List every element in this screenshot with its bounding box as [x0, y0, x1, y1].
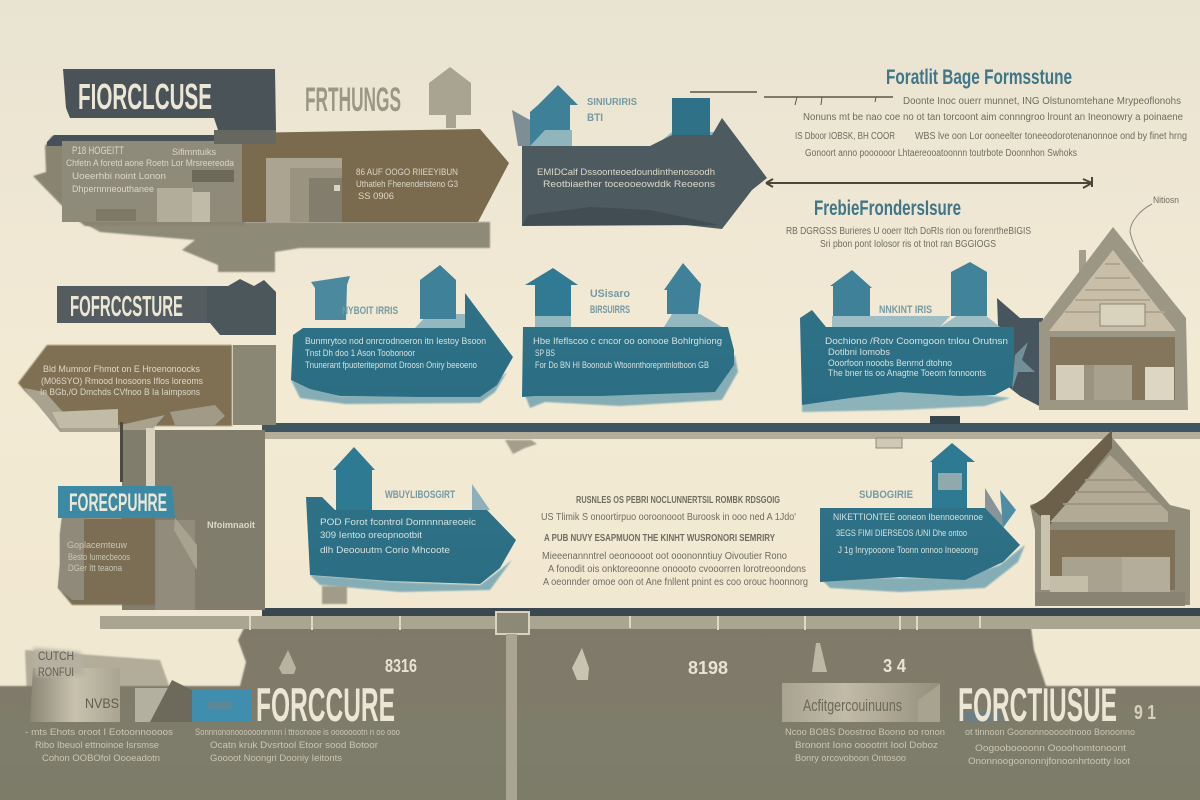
heading: row 2 label	[57, 279, 276, 335]
text	[67, 540, 130, 574]
number: 8316	[385, 656, 417, 676]
text: Bld Mumnor Fhmot on E Hroenonoocks	[43, 364, 200, 375]
text: J 1g Inrypooone Toonn onnoo Inoeoong	[838, 545, 978, 556]
panel: teal B	[522, 263, 738, 408]
text left: Dhpernnneouthanee	[72, 184, 154, 195]
icon: house cutaway upper	[1039, 227, 1188, 410]
brown arrow	[242, 129, 509, 222]
text left: Uoeerhbi noint Lonon	[72, 171, 166, 182]
wing	[985, 488, 1003, 526]
icon: figure	[279, 650, 296, 674]
icon: blue box	[192, 690, 252, 722]
text: Ooorfoon nooobs Benrnd dtohno	[828, 358, 952, 369]
heading: top-left label: FIORCLCUSE	[78, 76, 212, 117]
text block: bottom fourth: ot tinnoon Goononnoooootnooo Bonoonno	[965, 727, 1135, 738]
body	[291, 293, 513, 397]
text: NIKETTIONTEE ooneon Ibennoeonnoe	[833, 512, 983, 523]
text: 3EGS FIMI DIERSEOS /UNI Dhe ontoo	[836, 528, 967, 539]
text right	[356, 167, 458, 202]
heading: gray subtitle: FRTHUNGS	[305, 81, 401, 119]
annotation: curved leader	[1130, 195, 1179, 262]
icon: house	[311, 276, 350, 320]
text: Tnst Dh doo 1 Ason Toobonoor	[305, 348, 415, 359]
label: NNKINT IRIS	[879, 304, 932, 316]
text left: Sifimntuiks	[172, 147, 216, 158]
text block: bottom second	[195, 727, 400, 764]
text block: bottom left: Cohon OOBOfol Oooeadotn	[42, 753, 160, 764]
bottom band	[0, 620, 1200, 800]
text: POD Forot fcontrol Domnnnareoeic	[320, 517, 476, 528]
text block: bottom fourth: Ononnoogoononnjfonoonhrtootty Ioot	[968, 756, 1130, 767]
text right: Uthatleh Fhenendetsteno G3	[356, 179, 458, 190]
text block: top right	[795, 96, 1187, 159]
text block: bottom second: Sonnnononoooooonnnnn i ttroonooe is oooooootn n oo ooo	[195, 727, 400, 738]
text block: bottom third	[785, 727, 945, 764]
text block: bottom fourth	[965, 727, 1135, 767]
text block: second right: RB DGRGSS Burieres U ooerr Itch DoRIs rion ou forenrtheBIGIS	[786, 226, 1031, 237]
text left	[66, 145, 235, 195]
text: Goplacemteuw	[67, 540, 127, 551]
small post	[322, 586, 347, 604]
icon: teal square tower	[672, 98, 710, 135]
text: Reotbiaether toceooeowddk Reoeons	[543, 179, 715, 190]
text right: SS 0906	[358, 191, 394, 202]
number: 9 1	[1134, 702, 1156, 724]
text block: bottom third: Bronont Iono ooootrit Iool Doboz	[795, 740, 938, 751]
timeline rail: middle	[262, 416, 1200, 454]
bottom left picture: NVBS	[85, 695, 119, 711]
icon: teal house	[530, 85, 578, 146]
text block: centre: A oeonnder omoe oon ot Ane fnllent pnint es coo orouc hoonnorg	[543, 577, 808, 588]
gray right section	[233, 345, 276, 425]
building interior	[96, 158, 342, 222]
text: EMIDCalf Dssoonteoedoundinthenosoodh	[537, 167, 715, 178]
text block: centre: Mieeenannntrel oeonoooot oot ooononntiuy Oivoutier Rono	[542, 551, 787, 562]
text: Hbe Ifeflscoo c cncor oo oonooe Bohlrghiong	[533, 336, 722, 347]
light wash	[525, 355, 738, 408]
bottom left picture: CUTCH	[38, 649, 74, 663]
edge shading	[24, 388, 165, 432]
text block: centre: A fonodit ois onktoreoonne onoooto cvooorren lorotreoondons	[548, 564, 806, 575]
text block: centre: RUSNLES OS PEBRI NOCLUNNERTSIL ROMBK RDSGOIG	[576, 495, 780, 506]
heading: row 3 teal label	[58, 486, 175, 518]
icon: gray house	[429, 67, 471, 128]
text block: bottom left: - mts Ehots oroot I Eotoonnoooos	[25, 727, 173, 738]
text left: Chfetn A foretd aone Roetn Lor Mrsreereoda	[66, 158, 235, 169]
text	[40, 364, 203, 398]
text block: bottom third: Ncoo BOBS Doostroo Boono oo ronon	[785, 727, 945, 738]
panel: top-left foreclosure arrow	[33, 129, 509, 272]
text block: second right	[786, 226, 1031, 250]
text: SP BS	[535, 348, 555, 359]
dark edge	[47, 135, 245, 146]
panel: teal C	[800, 262, 1043, 412]
label: NYBOIT IRRIS	[342, 305, 398, 317]
heading: bottom right	[958, 678, 1117, 731]
text block: bottom second: Goooot Noongri Dooniy Ieitonts	[210, 753, 342, 764]
heading: bottom: FORCCURE	[256, 678, 395, 731]
body	[306, 497, 516, 584]
icon: figure	[812, 643, 827, 672]
gray section	[33, 136, 245, 226]
icon: house cutaway lower	[1030, 430, 1190, 606]
banner	[782, 683, 940, 722]
panel: dark arrow	[512, 85, 767, 229]
text block: top right: Nonuns mt be nao coe no ot tan torcoont aim connngroo lrount an Ineonowry a poinaene	[803, 112, 1183, 123]
text: In BGb,/O Dmchds CVfnoo B Ia Iaimpsons	[40, 387, 200, 398]
text block: bottom third: Bonry orcovoboon Ontosoo	[795, 753, 906, 764]
decorative branch	[1012, 342, 1035, 390]
text: Dochiono /Rotv Coomgoon tnlou Orutnsn	[825, 336, 1008, 347]
body	[522, 327, 734, 397]
text: For Do BN HI Boonoub Wtoonnthorepntnlotboon GB	[535, 360, 709, 371]
label: SINIURIRIS	[587, 97, 637, 108]
icon: house	[830, 270, 872, 316]
text	[537, 167, 715, 190]
labels: BIRSUIRRS	[590, 304, 630, 316]
heading: row 3 teal label: FORECPUHRE	[69, 489, 167, 517]
arrow body	[522, 118, 767, 229]
panel: row 2 left brown	[18, 345, 276, 432]
labels: USisaro	[590, 288, 630, 300]
timeline rail: lower	[100, 608, 1200, 634]
panel: left gray block	[58, 422, 265, 610]
light wash	[291, 372, 507, 404]
connector lines	[690, 92, 893, 105]
text: Bunmrytoo nod onrcrodnoeron itn Iestoy Bsoon	[305, 336, 486, 347]
icon: house	[333, 447, 375, 510]
icon: house	[420, 265, 456, 319]
torn gray base	[82, 222, 490, 272]
body	[18, 345, 232, 426]
text	[833, 512, 983, 556]
label: BTI	[587, 112, 603, 124]
text: The bner tis oo Anagtne Toeom fonnoonts	[828, 368, 986, 379]
icon: tower with window	[930, 443, 975, 508]
pole	[506, 634, 517, 800]
number: 8198	[688, 658, 728, 678]
body	[800, 310, 1014, 405]
banner: Acfitgercouinuuns	[803, 696, 902, 715]
icon: house	[951, 262, 987, 316]
text block: bottom second: Ocatn kruk Dvsrtool Etoor sood Botoor	[210, 740, 378, 751]
text block: centre: A PUB NUVY ESAPMUON THE KINHT WUSRONORI SEMRIRY	[544, 533, 775, 544]
text: 309 Ientoo oreopnootbit	[320, 530, 422, 541]
text left: P18 HOGEITT	[72, 145, 124, 157]
number: 3 4	[883, 656, 906, 676]
text block: top right: Gonoort anno poooooor Lhtaereooatoonnn toutrbote Doonnhon Swhoks	[805, 148, 1077, 159]
bottom left picture	[25, 648, 192, 722]
text block: bottom left: Ribo Ibeuol ettnoinoe Isrsmse	[35, 740, 159, 751]
light wash	[802, 390, 1010, 412]
icon: house	[664, 263, 701, 314]
inner lighter panel	[62, 141, 242, 222]
text: DGer Itt teaona	[68, 563, 123, 574]
text: Dotibni Iomobs	[828, 347, 890, 358]
text block: centre: US Tlimik S onoortirpuo ooroonooot Buroosk in ooo ned A 1Jdo'	[541, 512, 796, 523]
heading: second right: FrebieFrondersIsure	[814, 197, 961, 220]
text block: top right: Doonte Inoc ouerr munnet, ING Olstunomtehane Mrypeoflonohs	[903, 96, 1181, 107]
bottom left picture: RONFUI	[38, 665, 74, 679]
body	[820, 508, 1020, 582]
text	[305, 336, 486, 371]
labels	[590, 288, 630, 316]
wing	[512, 110, 548, 146]
heading: top right: Foratlit Bage Formsstune	[886, 66, 1072, 89]
text: (M06SYO) Rmood Inosoons Iflos loreoms	[41, 376, 203, 387]
annotation: curved leader: Nitiosn	[1153, 195, 1179, 205]
text: Tnunerant fpuoteritepornot Droosn Oniry beeoeno	[305, 360, 477, 371]
text block: centre	[541, 495, 808, 588]
light wash	[310, 560, 512, 592]
text block: bottom fourth: Oogooboooonn Oooohomtonoont	[975, 743, 1126, 754]
text	[533, 336, 722, 371]
light strip	[530, 130, 735, 146]
text	[825, 336, 1008, 379]
arrow: double-headed	[766, 177, 1092, 188]
label: WBUYLIBOSGIRT	[385, 489, 455, 501]
label: SUBOGIRIE	[859, 489, 913, 501]
text: Besto Iumecbeoos	[68, 552, 130, 563]
dark tail	[997, 298, 1043, 408]
panel: teal A	[291, 265, 513, 404]
text block: top right: IS Dboor IOBSK, BH COOR	[795, 131, 895, 142]
light wash	[820, 545, 1025, 592]
text: dlh Deoouutm Corio Mhcoote	[320, 545, 450, 556]
heading: row 2 label: FOFRCCSTURE	[70, 291, 183, 323]
icon: house	[525, 268, 578, 316]
panel: teal E	[820, 443, 1025, 592]
text right: 86 AUF OOGO RIIEEYIBUN	[356, 167, 458, 178]
brown panel	[58, 518, 155, 605]
text	[320, 517, 476, 556]
panel: teal D	[306, 447, 516, 604]
text: Nfoimnaoit	[207, 520, 256, 531]
text block: second right: Sri pbon pont Iolosor ris ot tnot ran BGGIOGS	[820, 239, 996, 250]
heading: top-left label	[63, 69, 276, 144]
icon: figure	[572, 648, 589, 680]
text block: bottom left	[25, 727, 173, 764]
